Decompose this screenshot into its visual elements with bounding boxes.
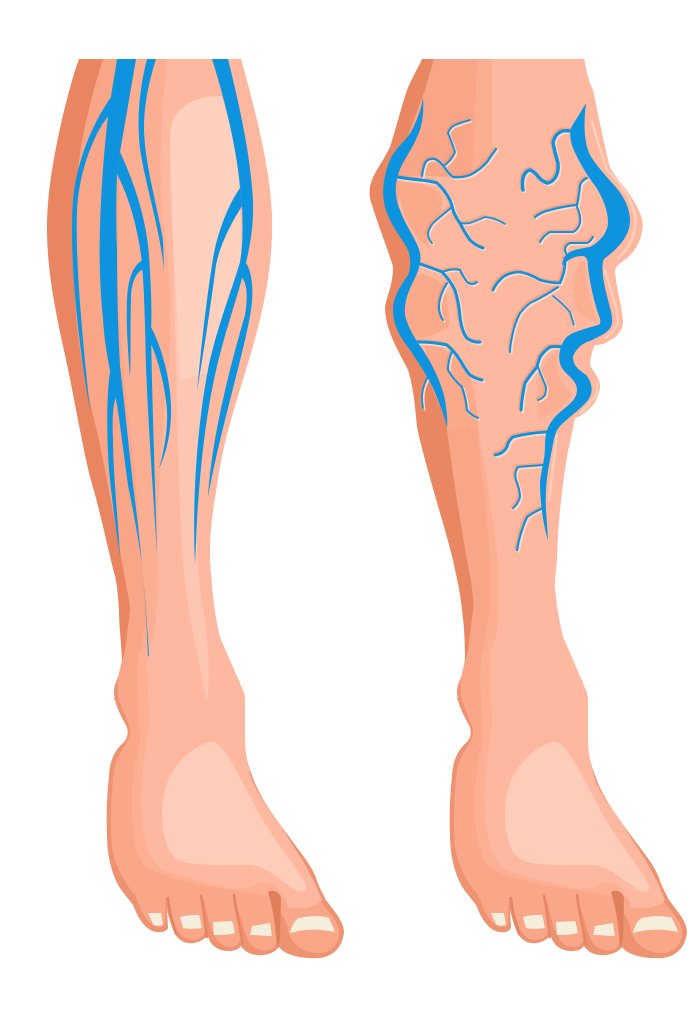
patch: upper swelling [398,182,442,250]
vein: inner right branch [197,188,242,391]
shin highlight strip [173,248,212,702]
vein: small loop branch [127,259,147,378]
swelling patches [398,182,478,430]
foot [450,640,687,958]
patch: middle swelling [402,274,450,338]
pale swelling rims [549,122,635,500]
vein: outer left branch [72,88,118,411]
mid skin tone [395,59,520,700]
light skin tone [147,59,272,700]
thin veins [397,120,593,550]
vein: second top vein [139,59,164,270]
vein: right swollen trunk [540,103,630,540]
light skin tone [398,59,643,700]
vein: outer right branch [208,263,252,497]
medium skin tone [118,59,200,700]
varicose leg [370,59,687,958]
mid skin tone [74,59,200,700]
patch: lower right swelling [537,350,572,420]
vein: lower left branch [107,372,120,556]
leg silhouette [370,59,643,700]
leg silhouette [47,59,272,700]
medium skin tone [470,59,530,700]
vein: inner branch [117,152,157,554]
vein: left swollen trunk [383,97,447,428]
veins [72,59,253,657]
foot [107,640,344,958]
vein: main trunk [100,59,149,657]
thin vein shadows and highlights [396,118,595,552]
vein: right trunk [194,59,253,564]
healthy leg [47,59,344,958]
vein: curved side branch [149,327,171,469]
patch: right swelling [572,262,598,323]
patch: lower swelling [424,345,478,430]
calf highlight [170,96,242,380]
right swelling shadow patches [537,262,598,420]
